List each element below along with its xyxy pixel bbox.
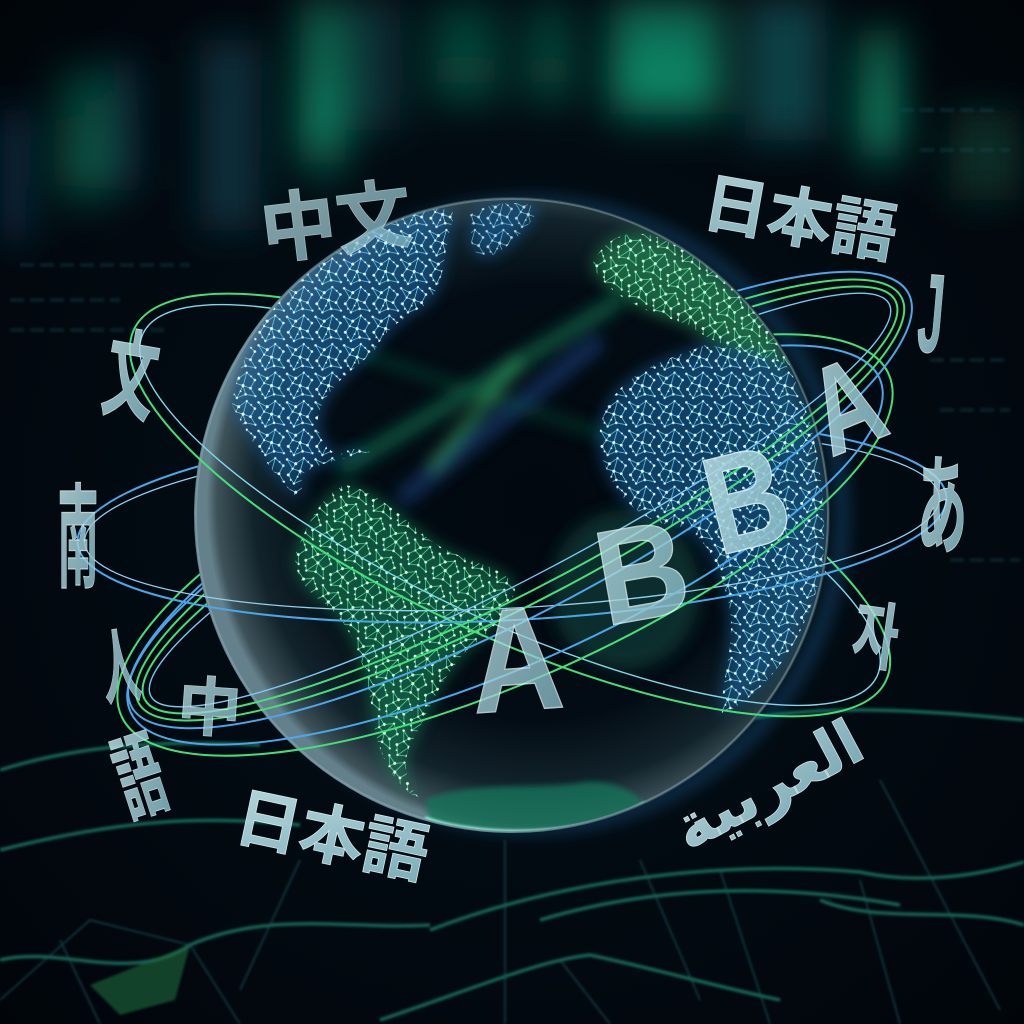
globe rim glow [196,199,828,831]
label: glyph lower left stacked: 人 [95,622,145,716]
front orbit rings [78,293,960,839]
continent: south america [295,485,515,798]
globe [194,197,830,833]
ring group: upper left to lower right [79,330,886,798]
letter: B centre: B [584,490,700,654]
continent: europe [592,234,790,365]
ring group: lower left to upper right [132,293,960,804]
label: glyph upper right: J [913,250,949,378]
language labels [58,166,967,892]
back orbit rings [66,196,946,716]
network floor [0,710,1024,1024]
label: glyph right: あ [917,447,967,569]
ring group: lower left outer [121,374,944,839]
outer blue glow [218,203,842,827]
continent: north america [232,209,455,496]
ring group: wide horizontal [78,497,952,643]
label: Japanese bottom: 日本語 [229,780,435,892]
letters on the orbit [465,329,903,745]
letter: A bottom: A [465,576,568,745]
land glow [232,203,824,798]
continent: greenland [470,203,538,257]
background data lines [10,110,1020,560]
aurora [0,0,1020,240]
label: Chinese lower left: 中 [175,670,244,746]
inner light streaks [340,300,700,670]
globe sphere [194,197,830,833]
label: glyph lower right: 자 [847,594,903,681]
letter: B right: B [689,414,804,585]
label: Chinese top: 中文 [256,172,417,275]
letter: A right: A [790,329,903,483]
continent: africa [599,345,824,715]
label: Arabic: العربية [662,707,875,865]
label: glyph far left: 南 [58,477,98,603]
label: glyph lower left bottom: 語 [103,723,178,834]
continent: antarctica [425,782,645,832]
label: Japanese top: 日本語 [698,166,902,272]
label: glyph left upper: 文 [96,321,165,435]
